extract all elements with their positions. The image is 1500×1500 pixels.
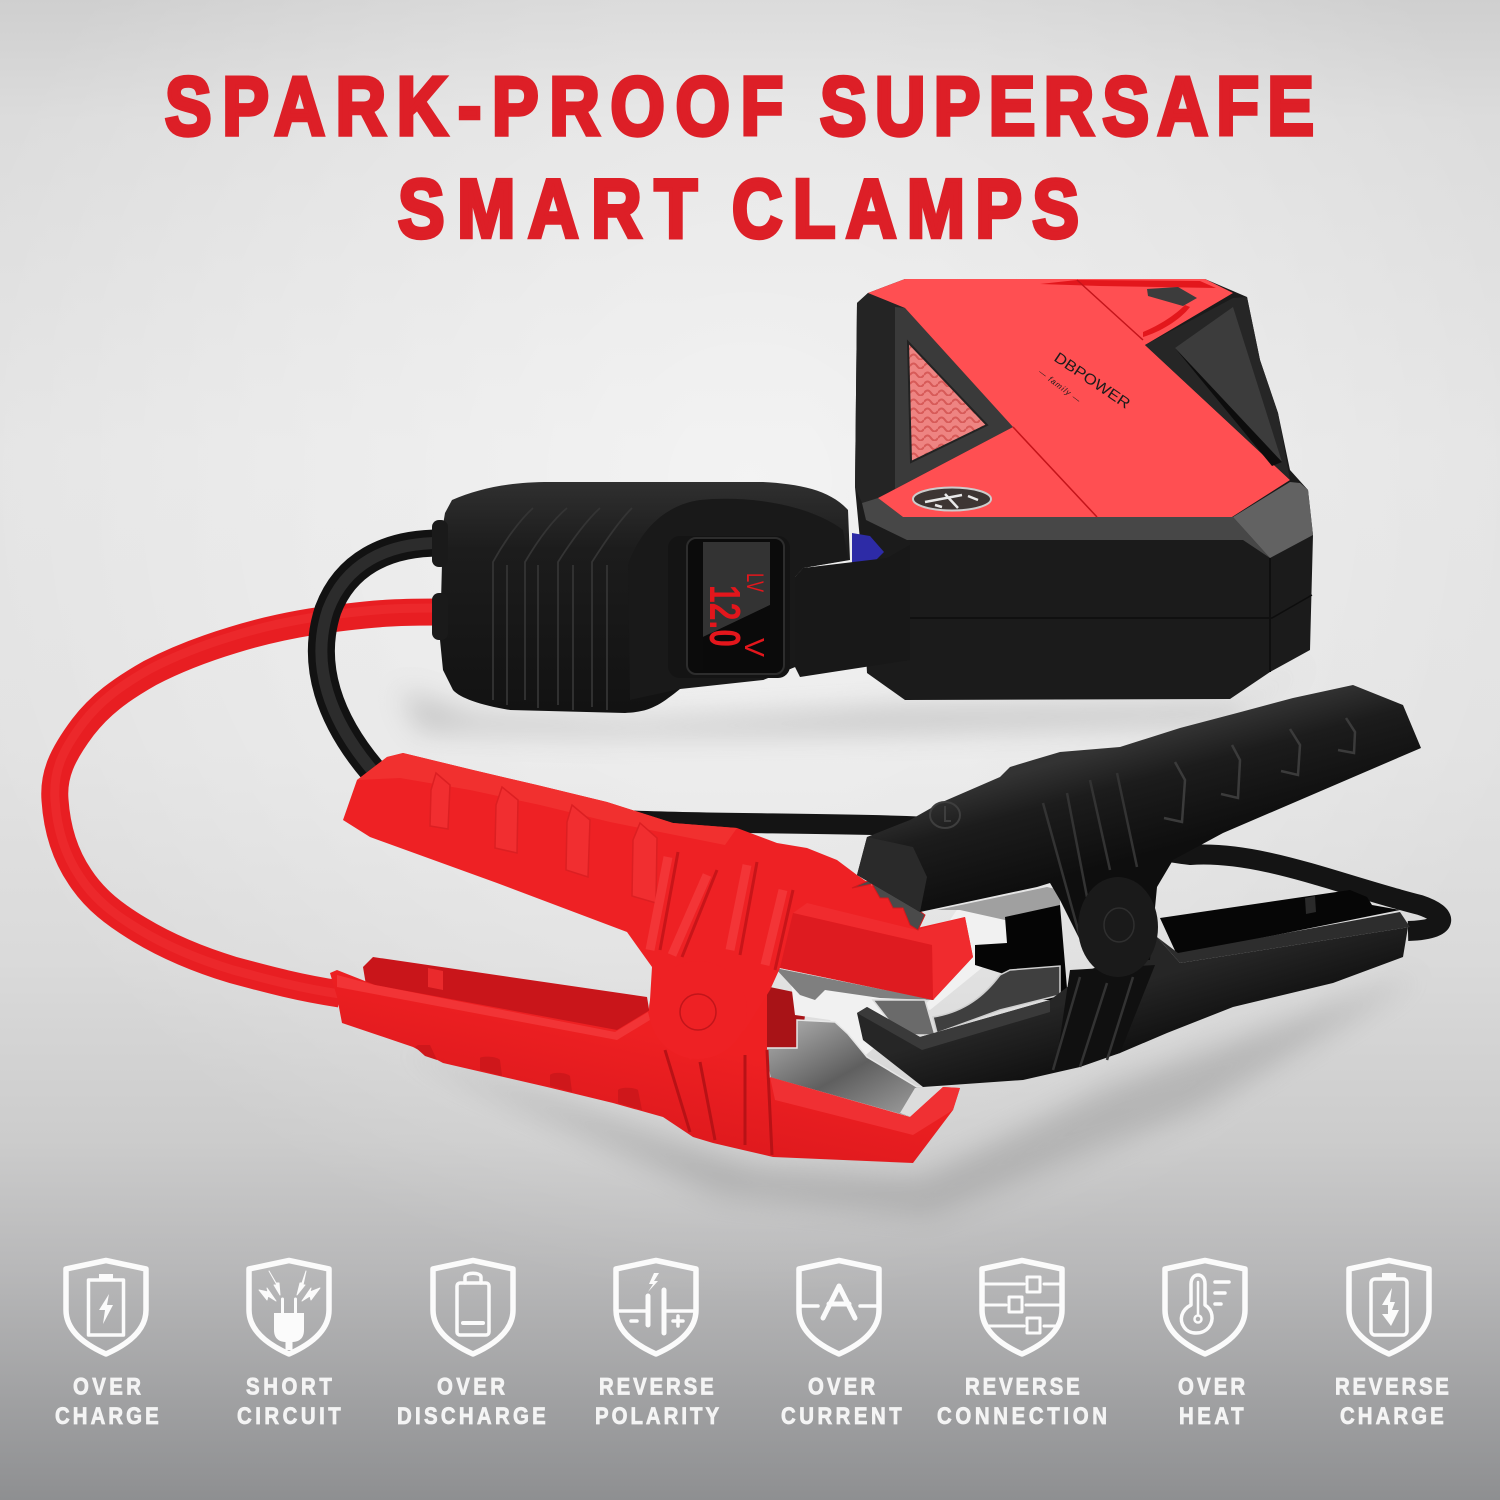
center ribs bbox=[650, 852, 793, 1155]
ribs bbox=[493, 508, 632, 710]
blue plug bbox=[852, 533, 884, 566]
deep red top streak bbox=[1040, 280, 1216, 288]
title: SPARK-PROOF bbox=[165, 61, 783, 153]
feature labels: DISCHARGE bbox=[397, 1402, 546, 1429]
voltage display: 12.0 bbox=[700, 585, 749, 647]
brand text bbox=[1036, 349, 1133, 413]
feature labels: CIRCUIT bbox=[237, 1402, 341, 1429]
pivot bbox=[649, 961, 747, 1059]
feature labels: CONNECTION bbox=[937, 1402, 1107, 1429]
icon: reverse connection shield bbox=[982, 1260, 1062, 1354]
grip notches bbox=[1164, 718, 1355, 822]
device bevel band bbox=[862, 498, 1270, 558]
icon: reverse charge shield bbox=[1349, 1260, 1429, 1354]
feature labels: CHARGE bbox=[55, 1402, 159, 1429]
right black wedge bbox=[1145, 297, 1290, 480]
upper metal red side bbox=[775, 968, 935, 1000]
black side lower metal bbox=[933, 966, 1060, 1033]
icon: reverse polarity shield bbox=[616, 1260, 696, 1354]
dark red interior bbox=[760, 985, 808, 1060]
black side upper metal bbox=[937, 887, 1060, 920]
right side edge bbox=[1269, 558, 1271, 672]
smart clamp box bbox=[432, 482, 850, 713]
lower tray bbox=[363, 957, 650, 1040]
metal jaws bbox=[760, 887, 1068, 1118]
upper nose facet bbox=[857, 837, 927, 912]
upper handle bbox=[343, 753, 973, 1060]
compass bbox=[913, 488, 991, 510]
lower lip bbox=[1157, 912, 1410, 963]
nose side shade bbox=[780, 913, 933, 1000]
device left face bbox=[855, 293, 1013, 503]
feature labels: OVER bbox=[1178, 1373, 1245, 1400]
nose top surface bbox=[793, 903, 973, 1000]
white gap highlight bbox=[790, 905, 1010, 1060]
teeth bbox=[852, 880, 925, 930]
lower handle bbox=[857, 927, 1410, 1087]
device body bbox=[855, 279, 1313, 700]
icon: over heat shield bbox=[1165, 1260, 1245, 1354]
icon: over current shield bbox=[799, 1260, 879, 1354]
deep red arc bbox=[1143, 305, 1190, 337]
icon: short circuit shield bbox=[249, 1260, 329, 1354]
soft floor shadows bbox=[400, 660, 1420, 1215]
power symbol bbox=[930, 802, 960, 828]
feature labels: OVER bbox=[808, 1373, 875, 1400]
feature labels: OVER bbox=[73, 1373, 141, 1400]
red clamp bbox=[330, 753, 973, 1163]
feature labels bbox=[55, 1373, 1449, 1429]
feature labels: SHORT bbox=[246, 1373, 332, 1400]
title: SMART bbox=[398, 163, 697, 255]
right facet bbox=[1233, 482, 1313, 558]
lower black cable bbox=[620, 820, 1441, 931]
center ribs bbox=[1043, 773, 1137, 937]
title: SUPERSAFE bbox=[820, 61, 1314, 153]
feature labels: HEAT bbox=[1179, 1402, 1244, 1429]
voltage display: V bbox=[739, 638, 770, 657]
jump starter device bbox=[855, 279, 1313, 700]
voltage display: LV bbox=[741, 573, 768, 592]
reflector bevel bbox=[895, 307, 1013, 489]
brand text: — family — bbox=[1036, 367, 1083, 405]
pivot bbox=[1078, 877, 1158, 977]
red cable bbox=[55, 608, 440, 994]
feature labels: REVERSE bbox=[599, 1373, 714, 1400]
red top panel bbox=[868, 279, 1290, 517]
icon: over charge shield bbox=[66, 1260, 146, 1354]
title: CLAMPS bbox=[732, 163, 1079, 255]
lower nose facet bbox=[770, 1077, 960, 1135]
feature labels: CHARGE bbox=[1340, 1402, 1444, 1429]
voltage display bbox=[668, 536, 790, 678]
lower grip bumps bbox=[415, 1045, 642, 1110]
title bbox=[165, 61, 1314, 255]
lower silver tip bbox=[900, 1087, 942, 1118]
feature labels: POLARITY bbox=[595, 1402, 719, 1429]
cable knobs bbox=[432, 520, 448, 640]
lower ribs bbox=[1053, 965, 1155, 1072]
connector tab bbox=[795, 545, 910, 677]
lower handle bbox=[330, 970, 960, 1163]
lower nose top bbox=[857, 1000, 1050, 1050]
icon: over discharge shield bbox=[433, 1260, 513, 1354]
center teeth bbox=[873, 1000, 935, 1035]
lower lip highlight bbox=[337, 975, 650, 1040]
lower body seam bbox=[906, 595, 1312, 618]
power button bbox=[1147, 287, 1197, 306]
handle top highlight bbox=[357, 753, 737, 845]
reflector triangle bbox=[908, 342, 987, 462]
lower metal red side bbox=[765, 1020, 942, 1118]
feature labels: CURRENT bbox=[781, 1402, 902, 1429]
feature labels: REVERSE bbox=[1335, 1373, 1449, 1400]
feature labels: OVER bbox=[437, 1373, 505, 1400]
feature labels: REVERSE bbox=[965, 1373, 1080, 1400]
hump around display bbox=[628, 499, 848, 700]
black clamp bbox=[857, 685, 1421, 1087]
upper black cable bbox=[321, 543, 440, 770]
upper handle bbox=[857, 685, 1421, 960]
brand text: DBPOWER bbox=[1051, 349, 1133, 413]
safety feature icons row bbox=[66, 1260, 1429, 1354]
grip notches bbox=[430, 773, 657, 903]
black side interior bbox=[975, 905, 1068, 1000]
lower tray bbox=[1160, 890, 1400, 955]
seam lines on red panel bbox=[1013, 280, 1143, 517]
